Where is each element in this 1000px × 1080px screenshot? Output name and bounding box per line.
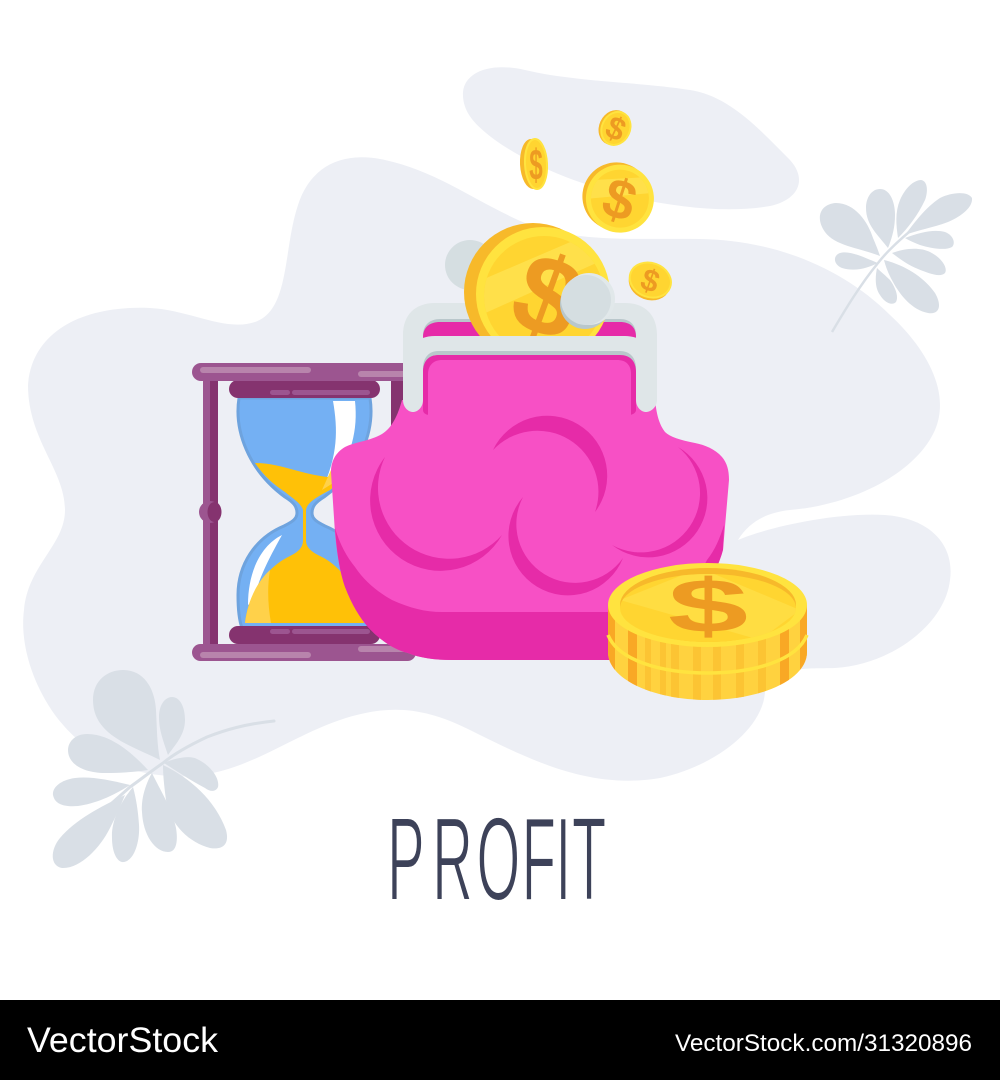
hourglass top and bottom bars	[192, 363, 416, 661]
gray clasp ball: front right	[560, 273, 615, 329]
purse folds	[370, 416, 707, 595]
stack divider	[608, 635, 807, 673]
footer brand: VectorStock	[27, 1021, 219, 1060]
leaf sprig: bottom left	[53, 670, 274, 868]
glass highlights	[322, 401, 356, 490]
falling coin: top	[593, 105, 636, 151]
falling coin: large: $	[595, 164, 644, 234]
background blob: main	[23, 157, 951, 781]
falling coin: large	[582, 162, 654, 233]
falling coin: narrow	[519, 138, 548, 190]
title: PROFIT	[387, 792, 606, 926]
stack dollar sign: $	[668, 564, 748, 648]
sand	[245, 463, 364, 623]
hourglass plates	[229, 380, 380, 644]
coin stack	[608, 563, 807, 700]
purse front frame	[403, 336, 657, 412]
footer bar	[0, 1000, 1000, 1080]
big coin	[464, 223, 609, 336]
hourglass glass	[238, 398, 371, 628]
dollar sign: $	[497, 227, 598, 366]
background blob: top	[463, 67, 799, 209]
hourglass frame posts	[199, 375, 403, 650]
falling coin: top: $	[600, 108, 632, 149]
falling coin: narrow: $	[529, 140, 543, 190]
footer url: VectorStock.com/31320896	[675, 1030, 972, 1057]
hourglass	[192, 363, 416, 661]
purse bottom shade	[335, 525, 724, 660]
purse opening panel	[423, 355, 636, 415]
purse back frame	[403, 303, 657, 400]
leaf sprig: top right	[820, 180, 972, 332]
gray clasp ball: back left	[445, 240, 495, 290]
falling coin: right	[624, 257, 676, 306]
falling coin: right: $	[636, 261, 664, 300]
purse body	[331, 336, 729, 660]
